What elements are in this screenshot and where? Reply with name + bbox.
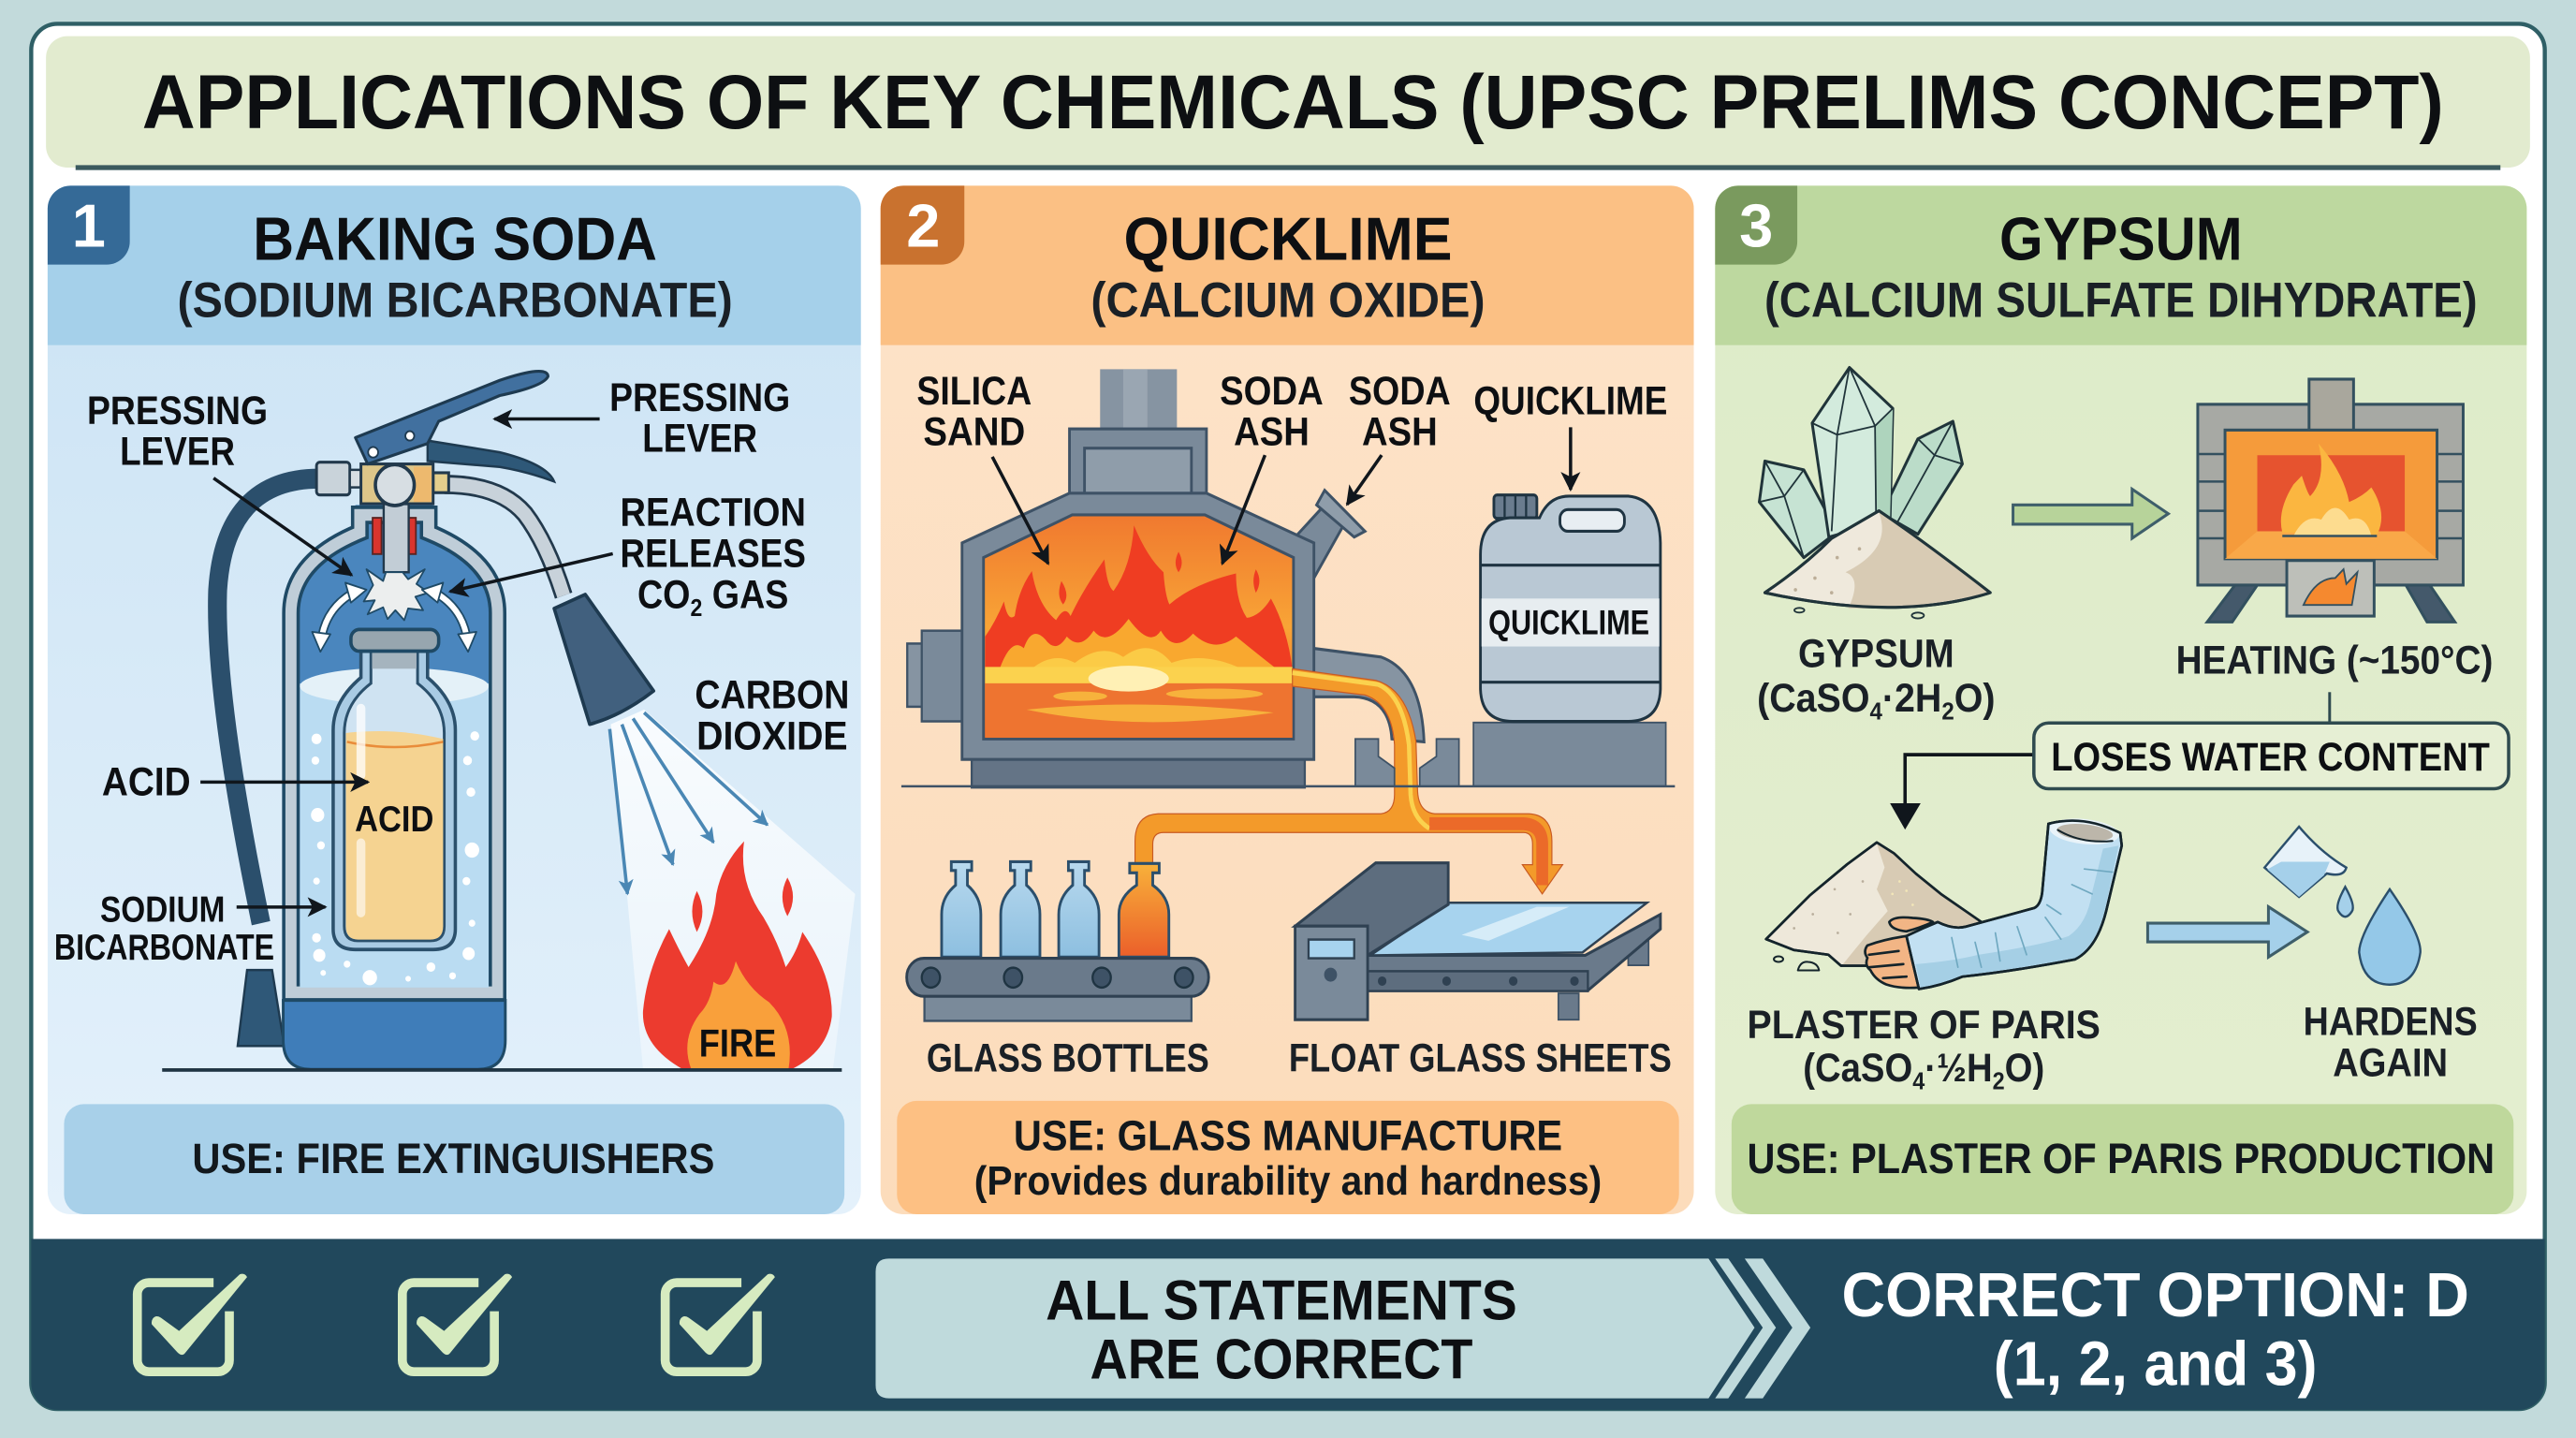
panel header: gypsum: (CALCIUM SULFATE DIHYDRATE) (1764, 273, 2478, 329)
molten glass (985, 668, 1293, 738)
label: soda ash one: ASH (1234, 410, 1310, 455)
label box: loses water content: LOSES WATER CONTENT (2051, 735, 2490, 780)
label: plaster of paris formula: 2 (1993, 1067, 2005, 1095)
spout (1290, 645, 1424, 741)
label: reaction releases CO2 gas: CO (637, 572, 697, 617)
ground (901, 785, 1675, 787)
use box: fire extinguishers: USE: FIRE EXTINGUISHERS (192, 1135, 714, 1182)
illustrations: gypsum process (1759, 368, 2463, 989)
footer bar (31, 1239, 2545, 1410)
panel header: gypsum: GYPSUM (1999, 204, 2243, 272)
ground line (162, 1068, 842, 1072)
label: carbon dioxide (695, 672, 849, 758)
label: carbon dioxide: CARBON (695, 672, 849, 717)
icon: conveyor (907, 959, 1208, 1020)
use box: glass manufacture: USE: GLASS MANUFACTURE (1014, 1112, 1562, 1160)
illustration: fire extinguisher (162, 372, 856, 1072)
icon: checkbox three (666, 1274, 775, 1372)
CO2 circulation arrows (321, 591, 357, 642)
panel: gypsum (1715, 185, 2526, 1214)
connector (2327, 692, 2332, 723)
panel header: quicklime: QUICKLIME (1123, 204, 1453, 272)
panel header: baking soda: (SODIUM BICARBONATE) (178, 273, 733, 329)
platform (1473, 723, 1666, 786)
label: carbon dioxide: DIOXIDE (696, 713, 848, 758)
label: reaction releases CO2 gas: RELEASES (621, 532, 806, 577)
furnace shell (962, 493, 1314, 759)
label: pressing lever right (494, 375, 790, 462)
furnace stack (1100, 369, 1177, 431)
label: hardens again: AGAIN (2333, 1041, 2448, 1086)
label: reaction releases CO2 gas (450, 491, 806, 622)
icon: plaster powder and cast (1766, 815, 2122, 989)
panel header: baking soda: 1 (72, 191, 106, 259)
arrow: plaster to hardens (2147, 907, 2307, 957)
label: gypsum formula: GYPSUM (1798, 632, 1954, 677)
label: glass bottles: GLASS BOTTLES (927, 1035, 1209, 1080)
label: pressing lever left (87, 389, 352, 575)
label: float glass sheets: FLOAT GLASS SHEETS (1289, 1035, 1672, 1080)
panel header: baking soda: BAKING SODA (253, 204, 657, 272)
label: plaster of paris formula: PLASTER OF PARIS (1748, 1003, 2100, 1048)
label: plaster of paris formula: O) (2005, 1046, 2044, 1091)
arrow: loses water to plaster (1905, 755, 2033, 809)
label: gypsum formula: ·2H (1882, 676, 1941, 721)
title: APPLICATIONS OF KEY CHEMICALS (UPSC PRELIMS CONCEPT) (142, 60, 2444, 145)
use box: glass manufacture (897, 1101, 1679, 1214)
label: pressing lever right: PRESSING (609, 375, 790, 420)
icon: bottles (942, 861, 1169, 957)
icon: quicklime jug (1481, 495, 1661, 722)
panel header: quicklime: 2 (906, 191, 940, 259)
use box: plaster of paris (1732, 1104, 2513, 1214)
use box: plaster of paris: USE: PLASTER OF PARIS PRODUCTION (1748, 1135, 2495, 1182)
label: gypsum formula: 4 (1869, 697, 1882, 726)
label: soda ash two: SODA (1349, 369, 1451, 414)
illustration: glass furnace and products (901, 369, 1675, 1020)
inner bottle (333, 652, 455, 949)
label: gypsum formula: O) (1954, 676, 1996, 721)
label: soda ash two: ASH (1362, 410, 1438, 455)
label: plaster of paris formula (1748, 1003, 2100, 1095)
label: soda ash one (1220, 369, 1324, 564)
label: quicklime (1473, 378, 1667, 641)
panel header: quicklime (881, 185, 1694, 345)
icon: kiln (2198, 379, 2463, 622)
panel header: baking soda (48, 185, 861, 345)
statement banner: ARE CORRECT (1090, 1328, 1472, 1391)
icon: float glass machine (1295, 863, 1661, 1020)
label: reaction releases CO2 gas: 2 (690, 594, 702, 622)
icon: checkbox one (138, 1274, 247, 1372)
label: silica sand: SAND (923, 410, 1025, 455)
label: fire: FIRE (699, 1021, 776, 1065)
label: quicklime: QUICKLIME (1488, 603, 1649, 641)
panel header: quicklime: (CALCIUM OXIDE) (1090, 273, 1486, 329)
label: acid: ACID (355, 800, 433, 840)
use box: glass manufacture: (Provides durability and hardness) (974, 1158, 1602, 1204)
label: silica sand: SILICA (916, 369, 1032, 414)
label: heating: HEATING (~150°C) (2176, 638, 2493, 683)
label: pressing lever left: LEVER (120, 430, 235, 475)
correct option: (1, 2, and 3) (1994, 1330, 2318, 1400)
body (284, 505, 505, 1069)
label: reaction releases CO2 gas: REACTION (621, 491, 806, 536)
label: pressing lever right: LEVER (642, 417, 757, 462)
icon: checkbox two (402, 1274, 512, 1372)
label: plaster of paris formula: 4 (1912, 1067, 1925, 1095)
label: acid: ACID (102, 759, 191, 804)
label: reaction releases CO2 gas: GAS (702, 572, 788, 617)
arrow: gypsum to heating (2013, 489, 2168, 538)
right tube (445, 484, 564, 595)
feed port (1290, 505, 1343, 578)
panel: baking soda (48, 185, 861, 1214)
valve head (433, 473, 448, 492)
statement banner: ALL STATEMENTS (1046, 1268, 1517, 1331)
correct option: CORRECT OPTION: D (1841, 1261, 2469, 1330)
label: gypsum formula: (CaSO (1757, 676, 1881, 721)
side unit (907, 643, 923, 707)
label: gypsum formula (1757, 632, 1996, 726)
bubbles (311, 731, 479, 985)
panel: quicklime (881, 185, 1694, 1214)
icon: gypsum crystals and powder (1759, 368, 1990, 619)
icon: water beaker and drops (2264, 827, 2421, 985)
title banner (46, 37, 2530, 170)
label: silica sand (916, 369, 1048, 564)
funnels (1355, 739, 1395, 786)
icon: fire (643, 842, 832, 1069)
spray (611, 710, 856, 1069)
label: sodium bicarbonate: SODIUM (100, 890, 225, 931)
panel header: gypsum: 3 (1739, 191, 1773, 259)
label box: loses water content (2034, 723, 2509, 788)
use box: fire extinguishers (64, 1104, 844, 1214)
hose (217, 478, 319, 923)
label: plaster of paris formula: ·½H (1925, 1046, 1993, 1091)
molten flow (1135, 668, 1562, 894)
label: sodium bicarbonate (54, 890, 326, 968)
label: sodium bicarbonate: BICARBONATE (54, 928, 274, 968)
label: gypsum formula: 2 (1941, 697, 1954, 726)
valve stem and burst (373, 518, 382, 554)
label: pressing lever left: PRESSING (87, 389, 268, 433)
label: plaster of paris formula: (CaSO (1803, 1046, 1926, 1091)
label: hardens again (2304, 1000, 2478, 1086)
label: acid (102, 759, 433, 840)
label: quicklime: QUICKLIME (1473, 378, 1667, 423)
panel header: gypsum (1715, 185, 2526, 345)
flames (985, 525, 1293, 668)
correct option (1841, 1261, 2469, 1400)
label: hardens again: HARDENS (2304, 1000, 2478, 1045)
lever (428, 441, 554, 481)
statement banner (875, 1258, 1810, 1399)
label: soda ash one: SODA (1220, 369, 1324, 414)
label: soda ash two (1347, 369, 1451, 505)
